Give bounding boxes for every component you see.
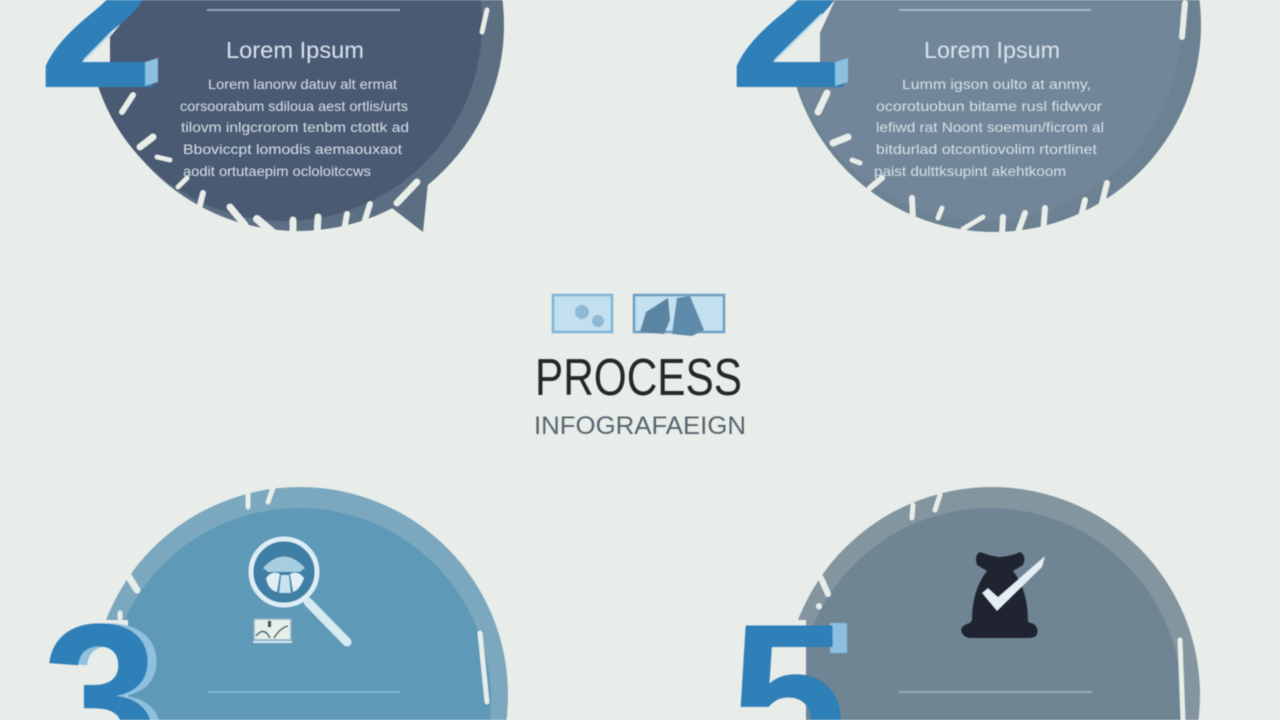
counter edge xyxy=(84,32,112,60)
numeral facet xyxy=(145,58,158,86)
spike xyxy=(392,163,430,232)
body text: corsoorabum sdiloua aest ortlis/urts xyxy=(180,98,408,114)
panel: step 3 bottom left xyxy=(92,487,508,720)
body text xyxy=(874,76,1104,179)
torn edge marks xyxy=(818,3,1185,235)
panel: step 2 top right xyxy=(787,0,1201,235)
body text: aodit ortutaepim ocloloitccws xyxy=(183,163,371,179)
panel: step 2 top left xyxy=(88,0,504,236)
outer ring xyxy=(787,0,1201,232)
outer ring xyxy=(92,487,508,720)
icon: small map xyxy=(253,619,292,643)
body text: ocorotuobun bitame rusl fidwvor xyxy=(876,98,1102,114)
body text: tilovm inlgcrorom tenbm ctottk ad xyxy=(181,119,409,135)
inner disc xyxy=(107,508,491,720)
outer ring xyxy=(92,0,504,231)
title: PROCESS xyxy=(535,349,742,407)
body text: Bboviccpt lomodis aemaouxaot xyxy=(183,141,402,157)
inner disc xyxy=(788,0,1182,221)
counter cut-out xyxy=(730,620,806,720)
subtitle: INFOGRAFAEIGN xyxy=(534,412,746,440)
icon: right image card with silhouette xyxy=(634,295,724,336)
body text: bitdurlad otcontiovolim rtortlinet xyxy=(876,141,1097,157)
torn edge marks xyxy=(819,495,1183,720)
numeral 3 xyxy=(40,580,168,720)
torn edge marks xyxy=(122,10,487,236)
heading: Lorem Ipsum xyxy=(924,37,1060,63)
counter edge xyxy=(775,14,822,60)
body text: lefiwd rat Noont soemun/ficrom al xyxy=(876,119,1104,135)
divider xyxy=(207,9,400,11)
numeral 2 right xyxy=(729,0,852,135)
heading: Lorem Ipsum xyxy=(226,37,364,63)
body text xyxy=(180,76,409,179)
counter cut-out xyxy=(40,0,140,62)
body text: Lorem lanorw datuv alt ermat xyxy=(208,76,397,92)
outer ring xyxy=(784,487,1200,720)
body text: Lumm igson oulto at anmy, xyxy=(902,76,1091,92)
numeral diagonal xyxy=(740,0,835,62)
torn edge marks xyxy=(120,488,487,702)
numeral facet xyxy=(830,623,847,653)
inner disc xyxy=(88,0,482,221)
divider xyxy=(899,9,1091,11)
body text: paist dulttksupint akehtkoom xyxy=(874,163,1066,179)
divider xyxy=(208,691,400,693)
numeral diagonal xyxy=(48,0,140,62)
center title block xyxy=(534,295,746,440)
icon: bag with check mark xyxy=(961,552,1045,638)
icon: magnifier xyxy=(251,539,347,642)
numeral facet xyxy=(835,58,848,86)
counter cut-out xyxy=(730,0,835,62)
counter cut-out xyxy=(40,620,128,720)
icon: left image card xyxy=(553,295,612,332)
inner disc xyxy=(798,508,1182,720)
numeral 5 xyxy=(730,580,847,720)
panel: step 5 bottom right xyxy=(784,487,1200,720)
numeral 2 left xyxy=(38,0,161,135)
divider xyxy=(899,691,1092,693)
